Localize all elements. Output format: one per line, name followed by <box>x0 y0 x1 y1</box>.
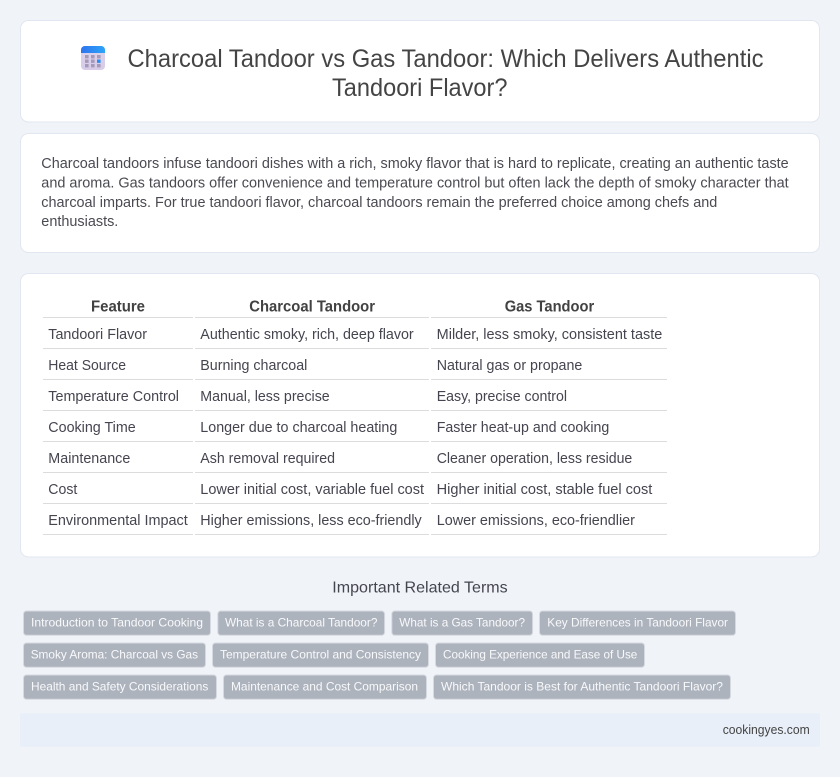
row: cost <box>48 482 652 498</box>
row: heat source: Burning charcoal <box>200 358 307 374</box>
tag: Health and Safety Considerations <box>31 680 208 694</box>
tag <box>24 643 206 667</box>
row: environmental impact: Higher emissions, less eco-friendly <box>200 513 422 529</box>
row: heat source: Natural gas or propane <box>437 358 582 374</box>
tag: Key Differences in Tandoori Flavor <box>547 616 728 630</box>
panel: introduction text: Charcoal tandoors infuse tandoori dishes with a rich, smoky flavor that is hard to replicate, creating an authentic taste <box>41 156 789 172</box>
table header: Charcoal Tandoor <box>249 298 375 315</box>
tag <box>434 675 730 699</box>
row: tandoori flavor <box>48 327 662 343</box>
heading: Tandoori Flavor? <box>332 74 508 102</box>
row: maintenance: Maintenance <box>48 451 130 467</box>
row: environmental impact: Environmental Impact <box>48 513 188 529</box>
tag <box>224 675 426 699</box>
panel: comparison table <box>20 274 820 557</box>
tag <box>212 643 428 667</box>
panel: introduction text: and aroma. Gas tandoors offer convenience and temperature control but often lack the depth of smoky character that <box>41 175 789 191</box>
tag <box>24 675 216 699</box>
row: maintenance <box>48 451 632 467</box>
row: heat source <box>48 358 582 374</box>
panel: introduction text <box>20 134 820 252</box>
row: environmental impact <box>48 513 635 529</box>
tag: What is a Charcoal Tandoor? <box>225 616 378 630</box>
panel: introduction text: enthusiasts. <box>41 214 118 230</box>
heading: Charcoal Tandoor vs Gas Tandoor: Which Delivers Authentic <box>128 45 764 73</box>
row: cost: Higher initial cost, stable fuel cost <box>437 482 652 498</box>
heading <box>128 45 764 102</box>
heading: related terms: Important Related Terms <box>332 580 508 597</box>
tag: Temperature Control and Consistency <box>220 648 421 662</box>
tag <box>24 611 210 635</box>
row: maintenance: Ash removal required <box>200 451 335 467</box>
row: heat source: Heat Source <box>48 358 126 374</box>
footer: cookingyes.com <box>723 723 810 737</box>
panel: title <box>20 20 820 122</box>
row: temperature control: Manual, less precise <box>200 389 330 405</box>
row: cooking time: Longer due to charcoal heating <box>200 420 397 436</box>
row: temperature control: Easy, precise control <box>437 389 567 405</box>
icon: calendar <box>81 46 105 70</box>
row: environmental impact: Lower emissions, eco-friendlier <box>437 513 635 529</box>
row: cooking time: Faster heat-up and cooking <box>437 420 609 436</box>
row: cooking time <box>48 420 609 436</box>
row: temperature control: Temperature Control <box>48 389 179 405</box>
row: cooking time: Cooking Time <box>48 420 136 436</box>
tag: Maintenance and Cost Comparison <box>231 680 418 694</box>
tag: Introduction to Tandoor Cooking <box>31 616 203 630</box>
row: tandoori flavor: Milder, less smoky, consistent taste <box>437 327 662 343</box>
row: cost: Cost <box>48 482 77 498</box>
table header <box>91 298 594 315</box>
row: cost: Lower initial cost, variable fuel cost <box>200 482 424 498</box>
tag <box>540 611 736 635</box>
tag <box>218 611 385 635</box>
tag: What is a Gas Tandoor? <box>399 616 525 630</box>
tag <box>392 611 533 635</box>
tag: Which Tandoor is Best for Authentic Tandoori Flavor? <box>441 680 723 694</box>
panel: introduction text: charcoal imparts. For true tandoori flavor, charcoal tandoors remain the preferred choice among chefs and <box>41 195 717 211</box>
row: temperature control <box>48 389 567 405</box>
footer <box>20 713 820 747</box>
tag <box>436 643 644 667</box>
row: tandoori flavor: Authentic smoky, rich, deep flavor <box>200 327 414 343</box>
tag: Cooking Experience and Ease of Use <box>443 648 638 662</box>
row: maintenance: Cleaner operation, less residue <box>437 451 632 467</box>
tag: Smoky Aroma: Charcoal vs Gas <box>31 648 198 662</box>
row: tandoori flavor: Tandoori Flavor <box>48 327 147 343</box>
related term tags <box>24 611 736 699</box>
table header: Feature <box>91 298 145 315</box>
table header: Gas Tandoor <box>505 298 594 315</box>
